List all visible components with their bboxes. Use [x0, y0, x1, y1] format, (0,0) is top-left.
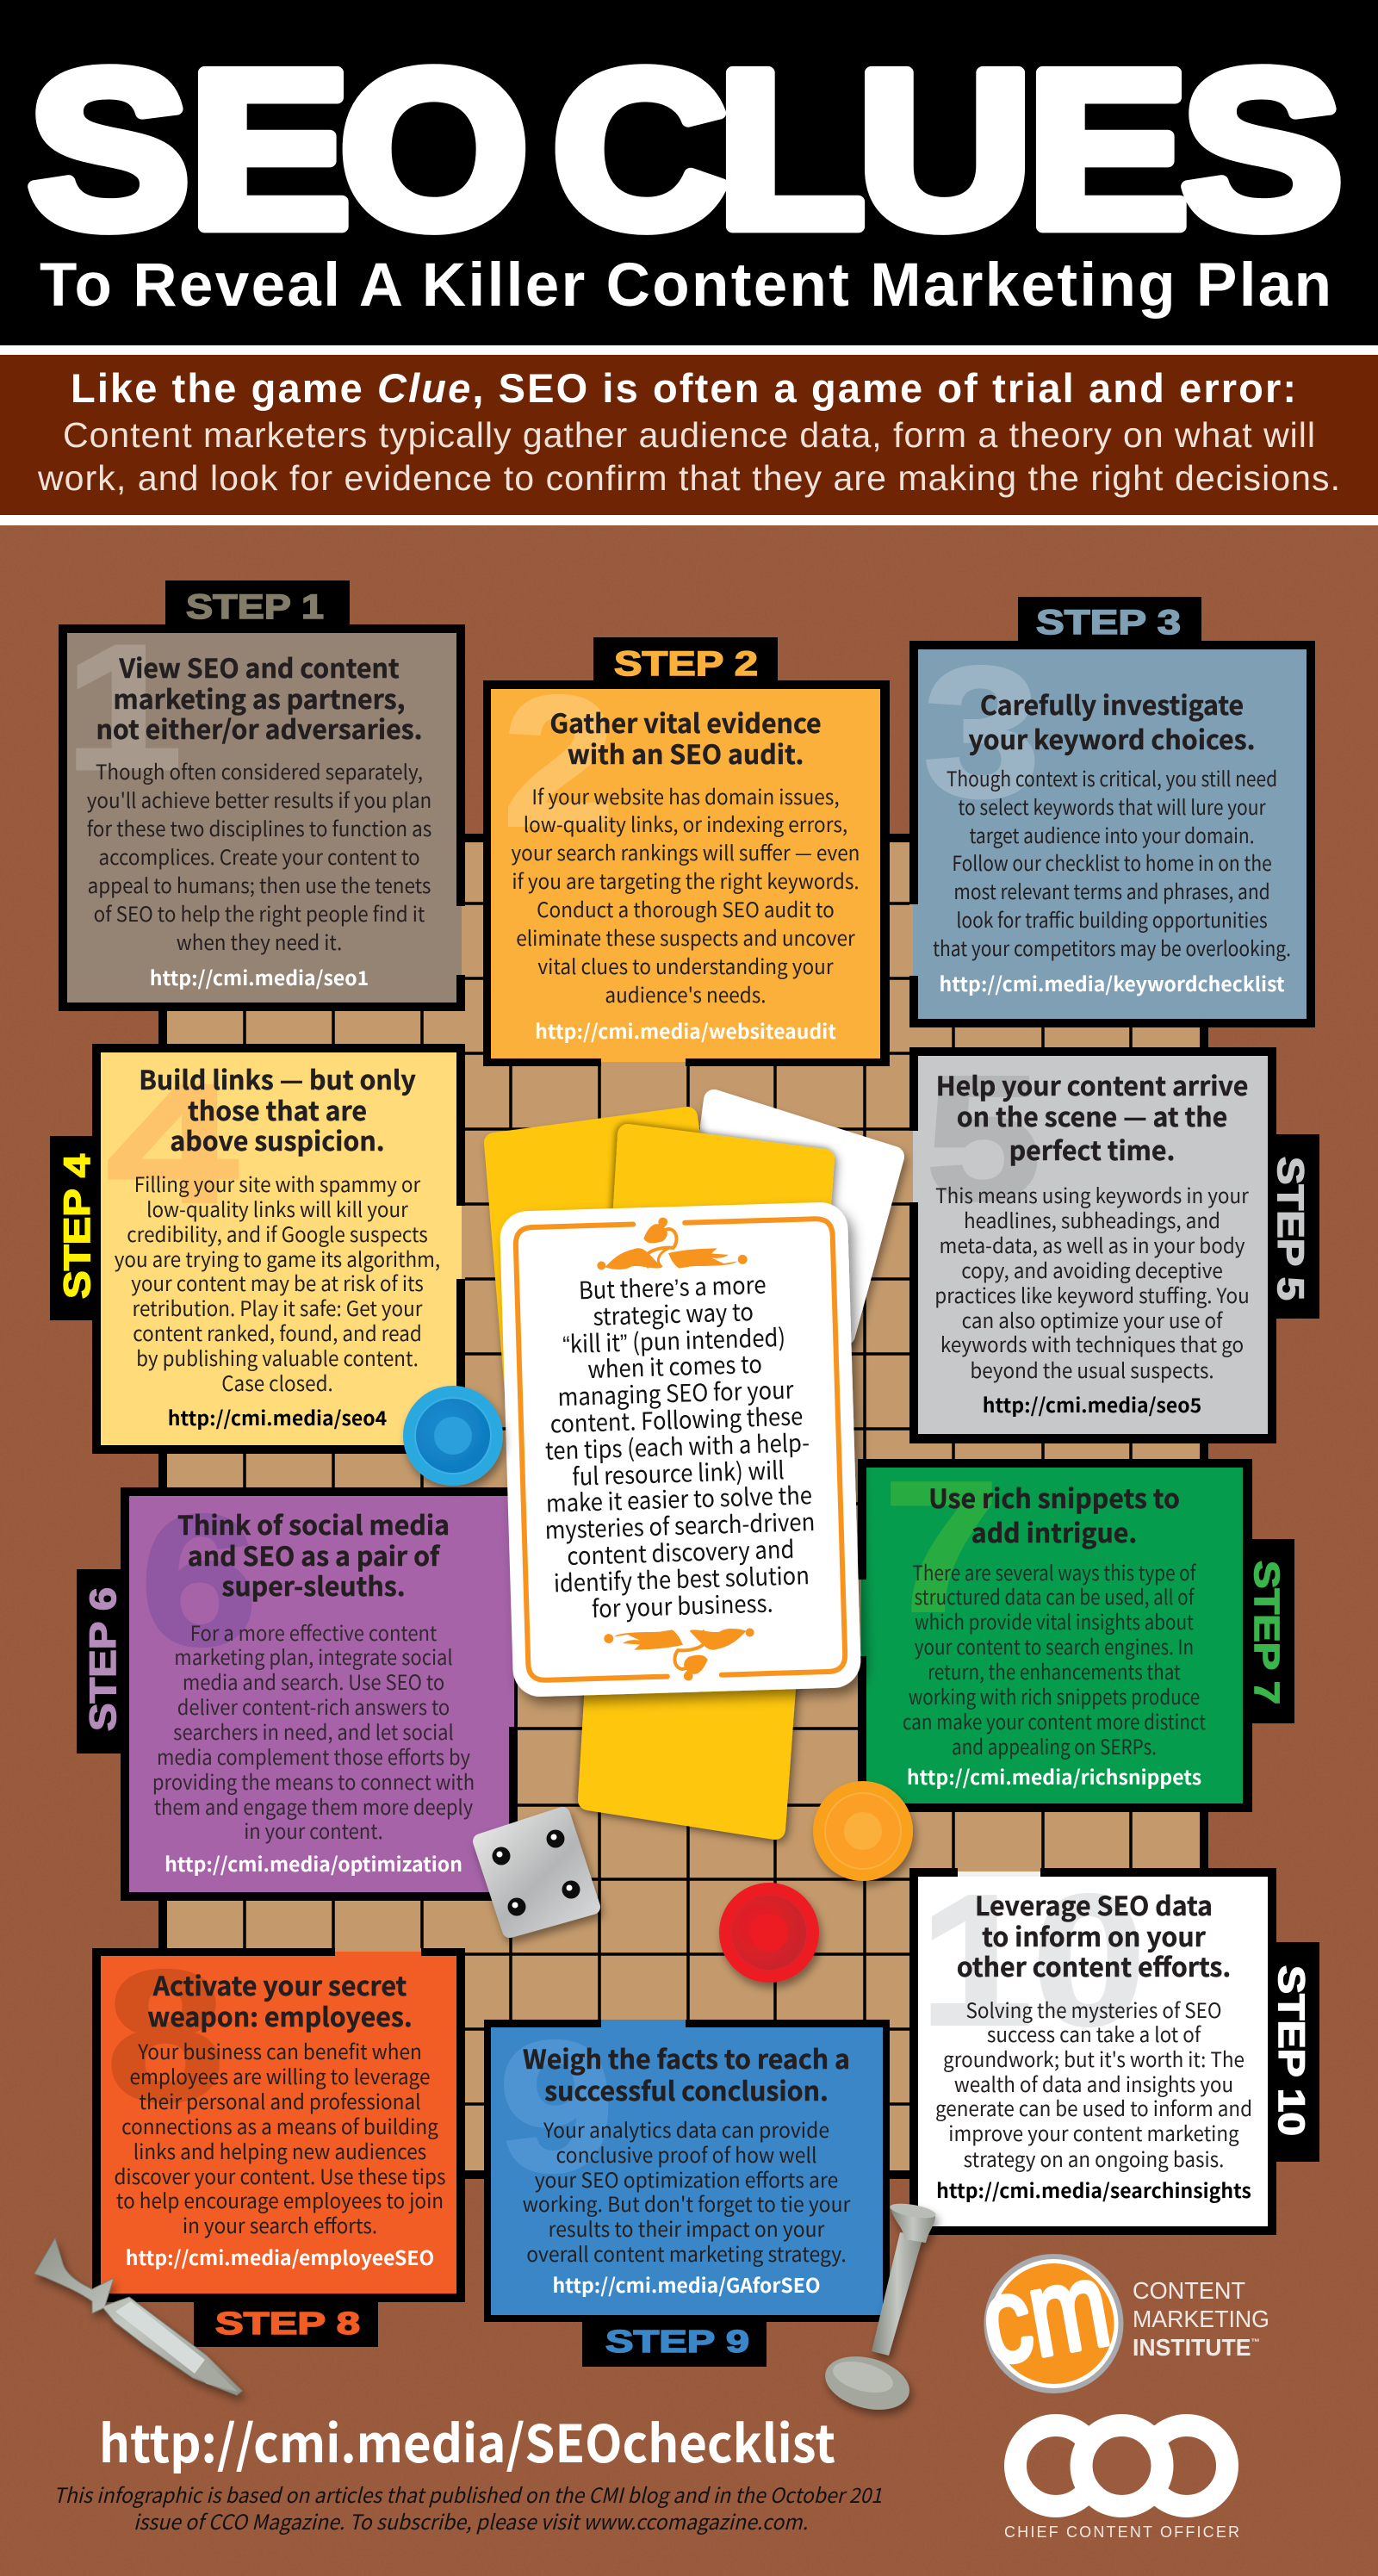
subtitle: To Reveal A Killer Content Marketing Plan — [40, 251, 1331, 320]
step 7 link: http://cmi.media/richsnippets — [907, 1761, 1201, 1791]
step 3 tab — [1018, 597, 1201, 642]
logo: chief content officer — [1004, 2425, 1239, 2541]
step 7 body: your content to search engines. In — [915, 1631, 1194, 1660]
title: SEO CLUES — [28, 24, 1344, 274]
step 5 body: copy, and avoiding deceptive — [961, 1254, 1223, 1284]
clue card text: content. Following these — [549, 1397, 804, 1440]
step 6 body: media complement those efforts by — [157, 1741, 470, 1771]
step 6 body: marketing plan, integrate social — [174, 1641, 453, 1671]
logo: chief content officer: CHIEF CONTENT OFFICER — [1004, 2523, 1239, 2541]
number 1: 1 — [65, 609, 182, 806]
step 5 heading: Help your content arrive — [936, 1065, 1248, 1103]
panel: step 10 — [909, 1856, 1319, 2235]
step 4 body: retribution. Play it safe: Get your — [132, 1292, 423, 1322]
step 9 body: your SEO optimization efforts are — [535, 2163, 838, 2194]
step 10 body — [935, 1994, 1252, 2173]
step 10 tab: STEP 10 — [1270, 1965, 1312, 2136]
step 8 heading — [147, 1965, 413, 2034]
game board — [163, 838, 1204, 2175]
step 1 heading: View SEO and content — [118, 648, 400, 686]
panel: step 8 — [92, 1932, 465, 2347]
logo: content marketing institute: cm — [972, 2235, 1119, 2390]
step 5 tab — [1269, 1134, 1319, 1319]
step 6 heading: and SEO as a pair of — [188, 1536, 441, 1574]
white back card — [689, 1100, 894, 1335]
step 2 body: low-quality links, or indexing errors, — [524, 808, 847, 838]
step 3 body: look for traffic building opportunities — [956, 904, 1268, 934]
step 4 body: by publishing valuable content. — [136, 1342, 419, 1372]
step 10 body: generate can be used to inform and — [935, 2092, 1252, 2122]
yellow back card — [494, 1117, 723, 1412]
step 10 card — [909, 1868, 1276, 2235]
step 2 body: vital clues to understanding your — [537, 950, 835, 980]
step 9 heading — [523, 2039, 850, 2108]
step 7 body — [903, 1557, 1207, 1760]
step 10 body: improve your content marketing — [948, 2117, 1239, 2147]
number 5: 5 — [926, 1040, 1041, 1237]
step 5 heading: perfect time. — [1009, 1130, 1175, 1168]
step 6 body: them and engage them more deeply — [154, 1791, 473, 1821]
step 7 card — [858, 1459, 1252, 1812]
step 8 heading: Activate your secret — [152, 1965, 407, 2003]
step 3 heading — [969, 685, 1255, 757]
step 2 body: If your website has domain issues, — [531, 780, 840, 810]
step 6 body: media and search. Use SEO to — [183, 1666, 444, 1696]
step 3 heading: Carefully investigate — [980, 685, 1244, 723]
icon: dagger — [34, 2238, 242, 2395]
step 6 heading: super-sleuths. — [221, 1566, 406, 1604]
white rule — [0, 345, 1378, 355]
logo: content marketing institute: INSTITUTE — [1133, 2334, 1257, 2361]
logo: content marketing institute: CONTENT — [1133, 2277, 1245, 2304]
step 6 link: http://cmi.media/optimization — [164, 1848, 462, 1878]
number 2: 2 — [503, 657, 615, 865]
step 7 body: working with rich snippets produce — [909, 1681, 1200, 1710]
step 7 body: and appealing on SERPs. — [952, 1731, 1157, 1760]
step 4 body: Case closed. — [221, 1367, 333, 1397]
step 1 body: appeal to humans; then use the tenets — [88, 869, 431, 899]
step 2 heading: with an SEO audit. — [568, 734, 804, 772]
intro band — [0, 355, 1378, 515]
step 6 tab — [77, 1569, 124, 1754]
step 9 tab — [582, 2322, 767, 2367]
step 1 tab — [165, 580, 350, 626]
step 4 body: Filling your site with spammy or — [134, 1168, 421, 1198]
step 2 body: your search rankings will suffer — even — [512, 836, 860, 866]
panel: step 4 — [50, 1044, 465, 1454]
source note: This infographic is based on articles that published on the CMI blog and in the October 201 — [53, 2479, 882, 2509]
clue card text: ful resource link) will — [572, 1451, 785, 1493]
intro text: Content marketers typically gather audience data, form a theory on what will — [63, 415, 1315, 455]
source note: issue of CCO Magazine. To subscribe, please visit www.ccomagazine.com. — [133, 2505, 808, 2536]
step 8 body — [114, 2035, 446, 2239]
intro text: work, and look for evidence to confirm that they are making the right decisions. — [37, 458, 1340, 498]
step 7 body: There are several ways this type of — [913, 1557, 1196, 1586]
number 8: 8 — [107, 1932, 224, 2139]
step 7 body: structured data can be used, all of — [915, 1581, 1195, 1611]
step 7 tab — [1247, 1539, 1294, 1723]
step 1 heading: marketing as partners, — [114, 679, 405, 717]
clue card text: managing SEO for your — [557, 1370, 795, 1413]
step 7 heading — [928, 1478, 1180, 1550]
step 6 body: For a more effective content — [190, 1617, 438, 1647]
step 1 heading: not either/or adversaries. — [96, 709, 423, 747]
step 5 tab: STEP 5 — [1269, 1157, 1311, 1300]
clue card text: make it easier to solve the — [545, 1476, 812, 1519]
step 10 heading: to inform on your — [982, 1916, 1207, 1954]
step 7 tab: STEP 7 — [1247, 1561, 1287, 1704]
step 9 card — [484, 2020, 890, 2322]
intro text — [37, 415, 1340, 498]
panel: step 6 — [77, 1476, 518, 1901]
number 6: 6 — [140, 1476, 258, 1684]
step 9 body: results to their impact on your — [549, 2213, 825, 2243]
step 10 body: Solving the mysteries of SEO — [966, 1994, 1221, 2024]
step 9 body: working. But don't forget to tie your — [523, 2188, 851, 2218]
panel: step 1 — [59, 580, 465, 1011]
step 8 body: in your search efforts. — [183, 2209, 377, 2239]
clue card text: for your business. — [591, 1584, 773, 1624]
step 10 body: groundwork; but it's worth it: The — [943, 2043, 1245, 2073]
step 5 heading — [936, 1065, 1248, 1168]
step 6 card — [121, 1487, 518, 1901]
step 1 body: accomplices. Create your content to — [98, 841, 420, 871]
step 8 body: discover your content. Use these tips — [114, 2160, 446, 2190]
clue card text: when it comes to — [587, 1344, 762, 1385]
step 3 body: Follow our checklist to home in on the — [952, 847, 1272, 877]
step 2 tab — [593, 637, 778, 683]
step 9 body: conclusive proof of how well — [556, 2138, 816, 2169]
step 6 tab: STEP 6 — [83, 1587, 124, 1731]
white rule — [0, 515, 1378, 525]
step 2 heading — [549, 703, 822, 772]
step 7 body: which provide vital insights about — [915, 1606, 1194, 1636]
number 9: 9 — [499, 2002, 614, 2210]
step 1 body: when they need it. — [177, 926, 342, 956]
step 3 body: Though context is critical, you still need — [947, 763, 1277, 792]
yellow long card — [588, 1134, 824, 1829]
step 7 heading: add intrigue. — [971, 1512, 1137, 1550]
step 4 body — [115, 1168, 440, 1397]
step 1 body: you'll achieve better results if you plan — [87, 784, 431, 814]
textured background — [0, 525, 1378, 2576]
step 5 link: http://cmi.media/seo5 — [983, 1389, 1201, 1418]
bottom link: http://cmi.media/SEOchecklist — [99, 2403, 835, 2478]
step 8 link: http://cmi.media/employeeSEO — [126, 2242, 434, 2271]
step 6 body: in your content. — [244, 1815, 383, 1845]
step 5 body: This means using keywords in your — [935, 1179, 1250, 1209]
step 7 body: can make your content more distinct — [903, 1706, 1207, 1735]
step 5 card — [909, 1047, 1276, 1443]
panel: step 5 — [909, 1040, 1319, 1443]
step 2 body: if you are targeting the right keywords. — [512, 865, 860, 895]
step 5 body: practices like keyword stuffing. You — [934, 1279, 1250, 1309]
clue card text: “kill it” (pun intended) — [562, 1319, 786, 1360]
clue card — [500, 1201, 861, 1698]
step 8 card — [92, 1948, 465, 2302]
icon: red game piece — [719, 1883, 819, 1983]
step 1 body: of SEO to help the right people find it — [94, 897, 425, 928]
number 7: 7 — [884, 1443, 999, 1650]
step 3 body — [933, 763, 1291, 962]
logo: content marketing institute: ™ — [1251, 2337, 1260, 2348]
step 3 body: most relevant terms and phrases, and — [953, 876, 1270, 905]
clue card text: But there’s a more — [578, 1265, 767, 1307]
step 1 body: Though often considered separately, — [96, 755, 423, 785]
step 1 tab: STEP 1 — [186, 588, 324, 626]
panel: step 7 — [858, 1443, 1294, 1812]
top ornament — [596, 1215, 748, 1271]
step 7 heading: Use rich snippets to — [928, 1478, 1180, 1516]
step 5 body: meta-data, as well as in your body — [940, 1229, 1245, 1259]
step 8 body: employees are willing to leverage — [130, 2060, 430, 2090]
step 8 heading: weapon: employees. — [147, 1996, 413, 2034]
step 4 body: credibility, and if Google suspects — [127, 1218, 428, 1248]
step 5 body — [934, 1179, 1250, 1384]
step 1 heading — [96, 648, 423, 747]
step 2 link: http://cmi.media/websiteaudit — [535, 1015, 836, 1045]
panel: step 9 — [484, 2002, 890, 2367]
step 10 link: http://cmi.media/searchinsights — [936, 2175, 1251, 2204]
step 4 card — [92, 1044, 465, 1454]
clue card text: identify the best solution — [553, 1556, 810, 1599]
step 9 tab: STEP 9 — [605, 2324, 749, 2359]
step 5 body: headlines, subheadings, and — [964, 1204, 1220, 1234]
step 4 body: low-quality links will kill your — [146, 1193, 409, 1223]
number 3: 3 — [923, 628, 1040, 835]
step 4 body: you are trying to game its algorithm, — [115, 1243, 440, 1273]
step 3 link: http://cmi.media/keywordchecklist — [939, 968, 1285, 997]
step 1 card — [59, 624, 465, 1011]
step 4 heading: those that are — [188, 1090, 367, 1128]
step 10 heading: other content efforts. — [957, 1946, 1231, 1984]
step 6 body — [152, 1617, 475, 1845]
bottom ornament — [604, 1627, 755, 1683]
icon: blue game piece — [403, 1386, 503, 1486]
step 3 body: that your competitors may be overlooking. — [933, 933, 1291, 962]
step 6 body: searchers in need, and let social — [173, 1716, 454, 1746]
step 3 heading: your keyword choices. — [969, 719, 1255, 757]
step 5 body: can also optimize your use of — [962, 1304, 1224, 1334]
step 3 card — [909, 641, 1315, 1027]
clue card text: strategic way to — [593, 1293, 754, 1332]
step 4 heading — [139, 1059, 416, 1158]
step 6 body: providing the means to connect with — [152, 1766, 475, 1796]
step 9 body: overall content marketing strategy. — [526, 2238, 847, 2268]
step 8 body: connections as a means of building — [121, 2110, 438, 2140]
step 4 link: http://cmi.media/seo4 — [168, 1402, 387, 1431]
step 1 body — [87, 755, 431, 956]
clue card text: ten tips (each with a help- — [544, 1424, 810, 1467]
step 5 body: keywords with techniques that go — [940, 1328, 1244, 1358]
step 10 tab — [1270, 1942, 1319, 2162]
step 2 body: eliminate these suspects and uncover — [516, 922, 856, 952]
card body and border — [500, 1201, 861, 1698]
step 4 tab: STEP 4 — [57, 1154, 98, 1299]
icon: die — [481, 1815, 593, 1930]
step 10 body: success can take a lot of — [987, 2018, 1202, 2048]
step 5 body: beyond the usual suspects. — [970, 1354, 1214, 1384]
step 8 body: links and helping new audiences — [133, 2135, 426, 2165]
step 10 heading — [957, 1885, 1231, 1984]
logo: content marketing institute — [972, 2235, 1269, 2393]
icon: candlestick — [819, 2200, 937, 2418]
step 3 tab: STEP 3 — [1036, 604, 1181, 642]
clue card text: content discovery and — [567, 1530, 795, 1572]
step 8 body: their personal and professional — [140, 2085, 420, 2115]
step 2 tab: STEP 2 — [614, 645, 758, 683]
icon: orange game piece — [813, 1781, 913, 1881]
step 2 card — [483, 680, 890, 1066]
step 4 body: your content may be at risk of its — [131, 1267, 424, 1297]
step 7 body: return, the enhancements that — [928, 1656, 1181, 1685]
step 10 body: wealth of data and insights you — [954, 2068, 1233, 2098]
step 8 tab: STEP 8 — [215, 2306, 360, 2341]
clue card text: mysteries of search-driven — [544, 1503, 816, 1546]
source note — [53, 2479, 882, 2536]
step 6 body: deliver content-rich answers to — [177, 1691, 450, 1721]
step 2 heading: Gather vital evidence — [549, 703, 822, 741]
step 10 heading: Leverage SEO data — [975, 1885, 1213, 1923]
step 5 heading: on the scene — at the — [957, 1096, 1227, 1134]
step 4 body: content ranked, found, and read — [133, 1317, 422, 1347]
step 9 body — [523, 2114, 851, 2268]
step 1 body: for these two disciplines to function as — [87, 812, 431, 842]
step 2 body: Conduct a thorough SEO audit to — [537, 893, 835, 923]
step 9 heading: successful conclusion. — [544, 2070, 829, 2108]
step 9 body: Your analytics data can provide — [543, 2114, 829, 2144]
logo: content marketing institute: MARKETING — [1133, 2306, 1269, 2332]
step 1 link: http://cmi.media/seo1 — [150, 962, 369, 991]
step 4 heading: above suspicion. — [170, 1120, 385, 1158]
step 8 body: Your business can benefit when — [137, 2035, 422, 2065]
step 6 heading — [177, 1505, 450, 1604]
panel: step 2 — [483, 637, 890, 1066]
clue card text — [537, 1264, 818, 1626]
step 8 tab — [194, 2302, 378, 2347]
step 6 heading: Think of social media — [177, 1505, 450, 1542]
header band — [0, 0, 1378, 345]
step 4 tab — [50, 1136, 101, 1320]
step 8 body: to help encourage employees to join — [116, 2184, 444, 2214]
number 4: 4 — [107, 1050, 238, 1238]
step 2 body — [512, 780, 860, 1009]
step 9 link: http://cmi.media/GAforSEO — [552, 2269, 821, 2299]
number 10: 10 — [920, 1856, 1145, 2064]
step 3 body: target audience into your domain. — [970, 820, 1255, 849]
step 2 body: audience's needs. — [605, 978, 767, 1009]
step 4 heading: Build links — but only — [139, 1059, 416, 1097]
intro heading: Like the game Clue, SEO is often a game of trial and error: — [71, 365, 1296, 411]
step 9 heading: Weigh the facts to reach a — [523, 2039, 850, 2076]
step 3 body: to select keywords that will lure your — [958, 791, 1266, 821]
step 10 body: strategy on an ongoing basis. — [964, 2143, 1224, 2173]
panel: step 3 — [909, 597, 1315, 1027]
